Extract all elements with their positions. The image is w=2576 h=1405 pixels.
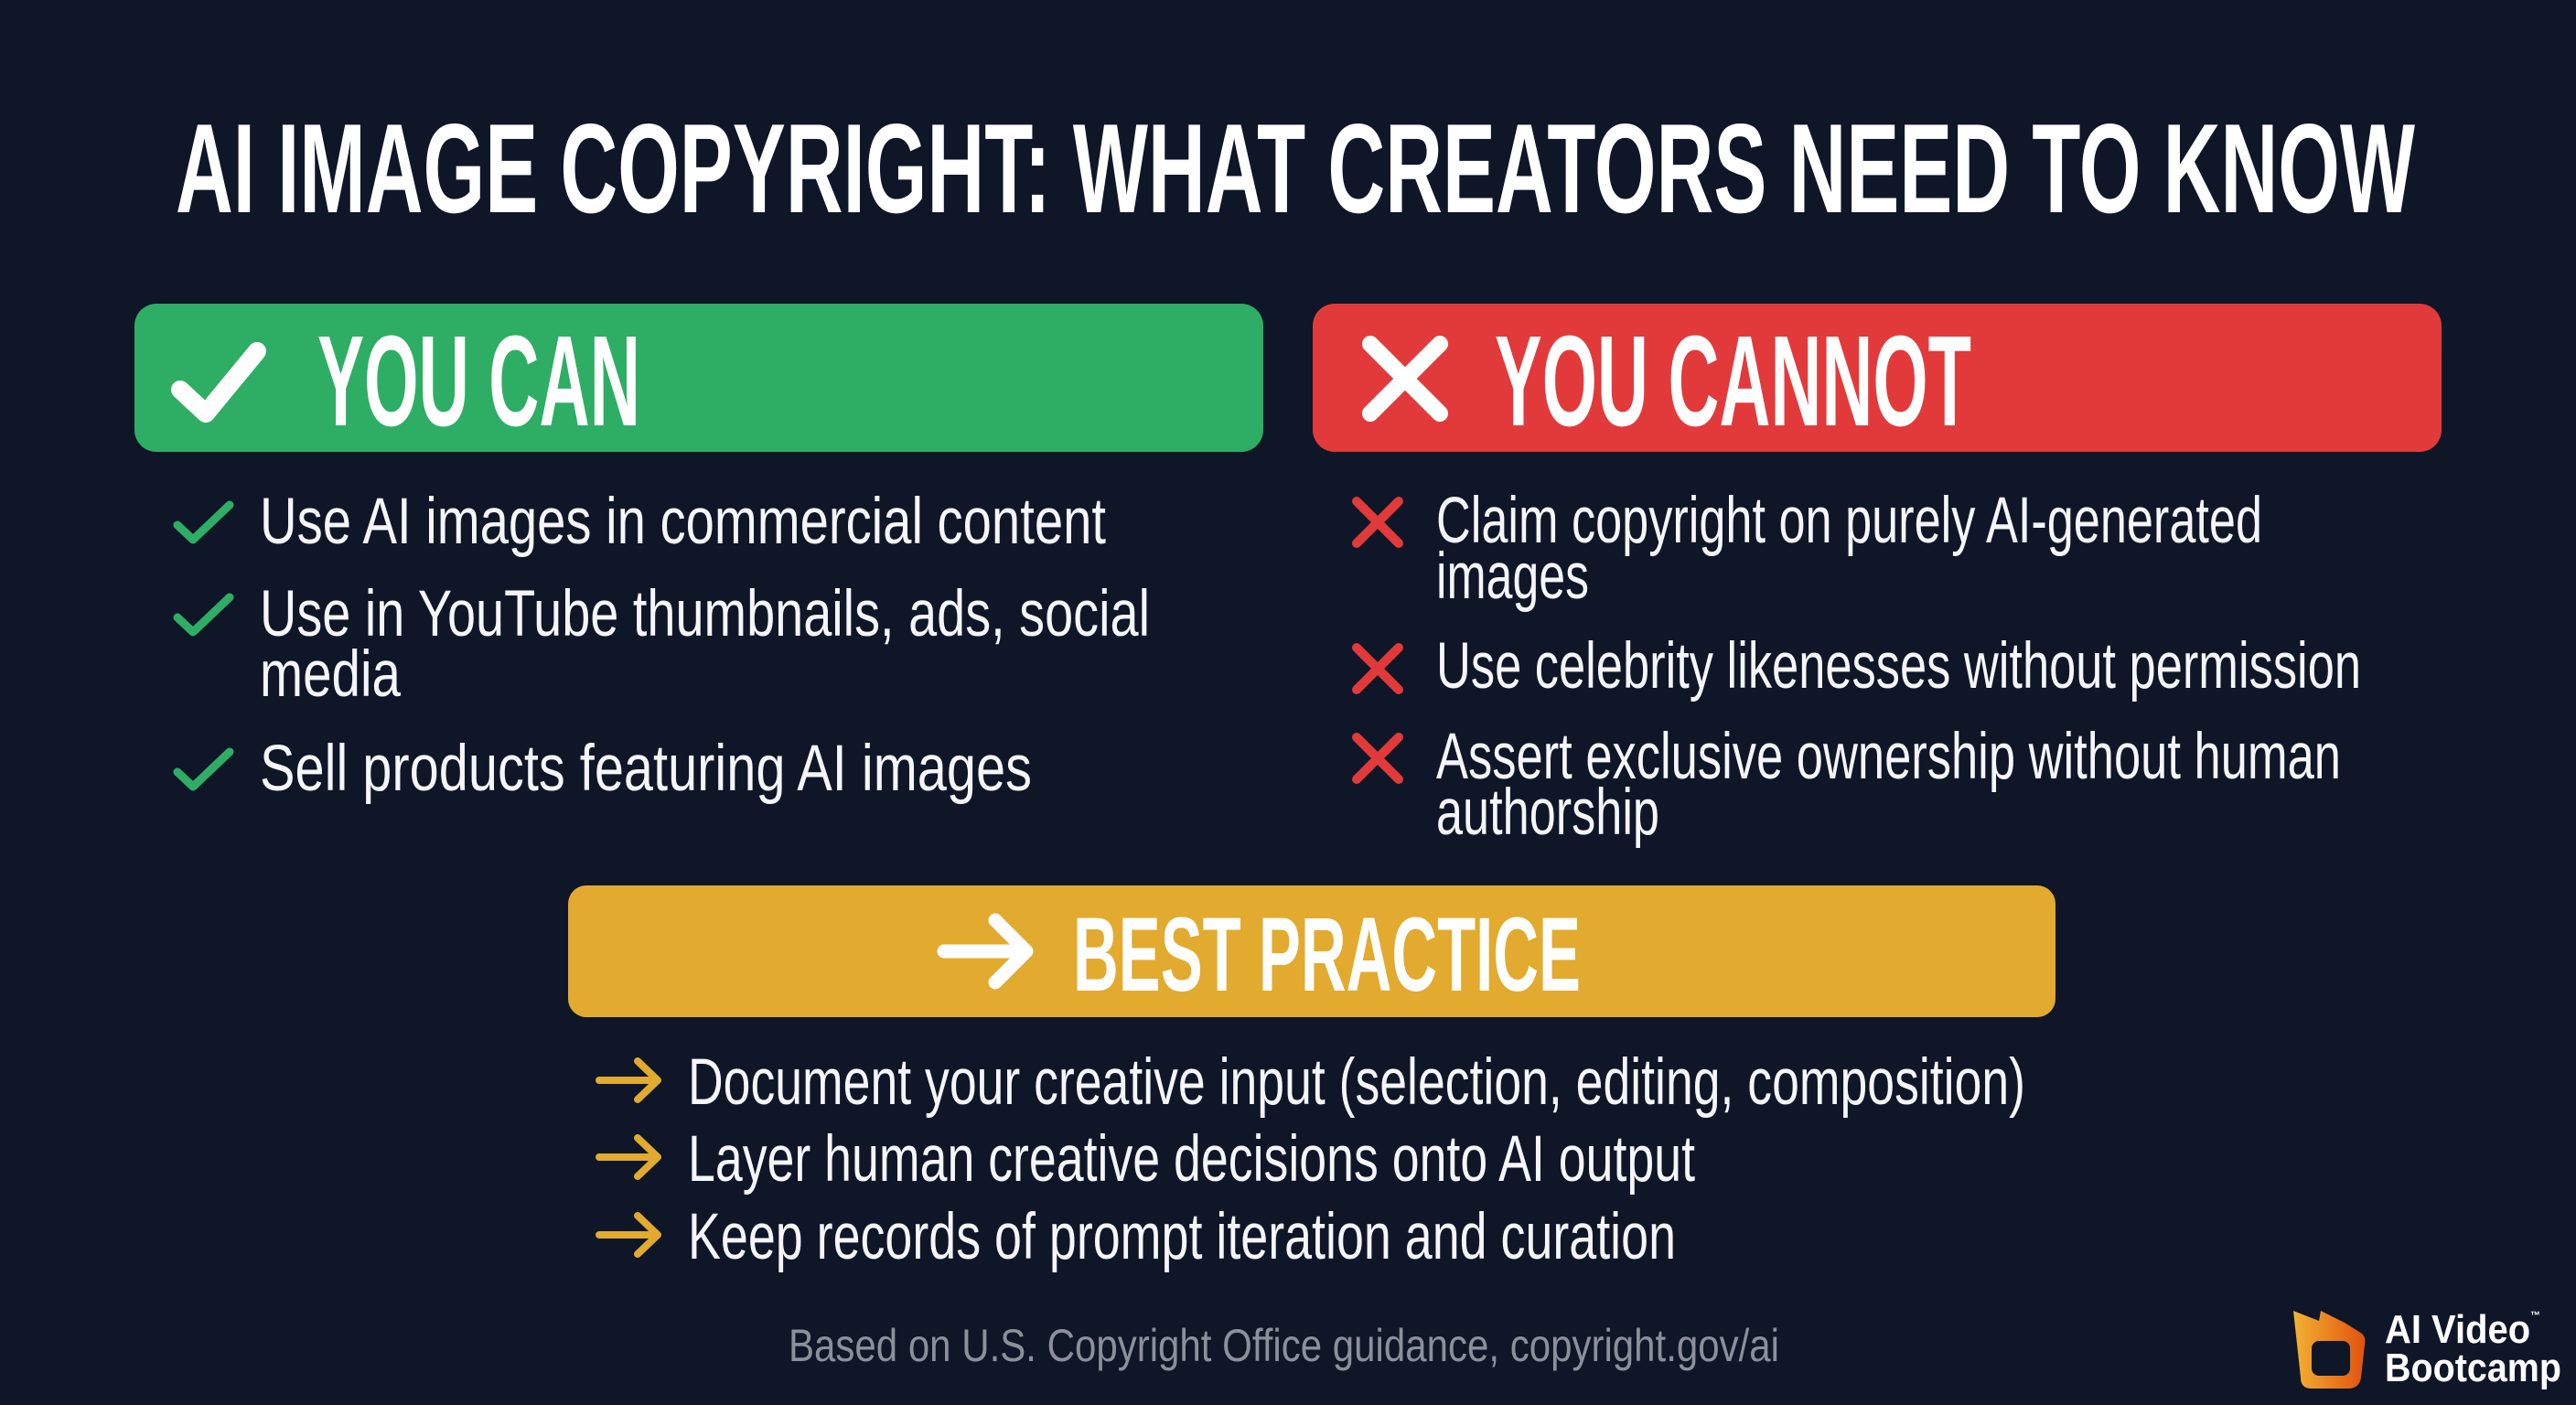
red header bar (1313, 304, 2442, 452)
item 1: Claim copyright on purely AI-generated (1436, 485, 2262, 557)
item 3: Assert exclusive ownership without human (1436, 721, 2341, 793)
icon: logo mark (2293, 1311, 2366, 1389)
icon: check header (171, 342, 266, 423)
item 2: Use celebrity likenesses without permission (1436, 630, 2361, 702)
item 2 (174, 578, 1150, 711)
panel: best practice (568, 885, 2055, 1273)
gold header bar (568, 885, 2055, 1017)
heading: best practice: BEST PRACTICE (1073, 896, 1581, 1014)
item 3: Keep records of prompt iteration and curation (688, 1201, 1676, 1273)
icon: arrow header (937, 913, 1034, 990)
heading: you cannot: YOU CANNOT (1495, 308, 1971, 453)
item 1: Use AI images in commercial content (260, 486, 1106, 558)
item 3: authorship (1436, 777, 1659, 849)
item 3: Sell products featuring AI images (260, 733, 1032, 805)
logo (2293, 1307, 2561, 1390)
item 1 (1352, 485, 2262, 613)
icon: x header (1362, 336, 1448, 422)
logo: Bootcamp (2385, 1346, 2561, 1390)
panel: you cannot (1313, 304, 2442, 849)
item 3 (1352, 721, 2341, 849)
item 1: images (1436, 541, 1589, 613)
item 1: Document your creative input (selection, editing, composition) (688, 1046, 2025, 1119)
panel: you can (134, 304, 1263, 805)
item 2: Use in YouTube thumbnails, ads, social (260, 578, 1150, 650)
title: AI IMAGE COPYRIGHT: WHAT CREATORS NEED TO KNOW (176, 98, 2415, 240)
heading: you can: YOU CAN (317, 308, 640, 453)
logo text: AI Video™ (2385, 1307, 2540, 1352)
item 2: Layer human creative decisions onto AI output (688, 1123, 1695, 1196)
green header bar (134, 304, 1263, 452)
footer source note: Based on U.S. Copyright Office guidance, copyright.gov/ai (789, 1320, 1779, 1371)
item 2: media (260, 638, 401, 711)
